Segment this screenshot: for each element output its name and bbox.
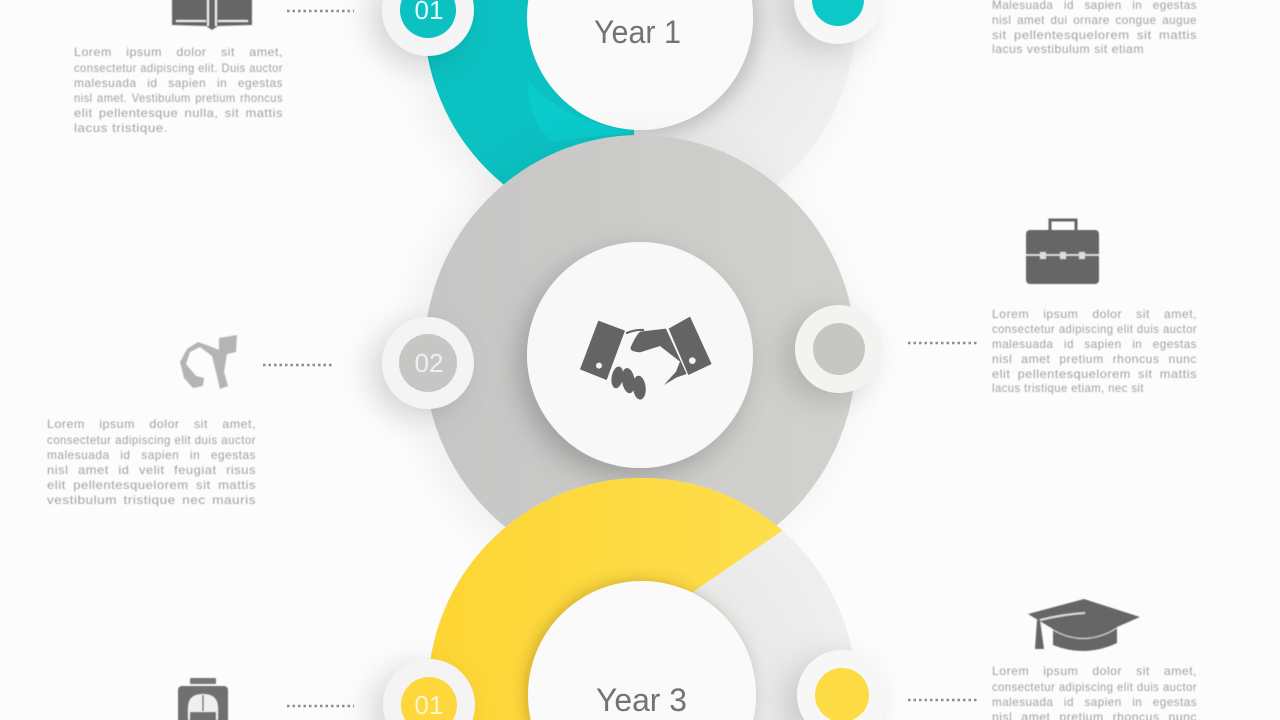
panel: year 3 ring xyxy=(428,478,856,720)
teal arc xyxy=(428,0,634,184)
text block: top right: sit pellentesquelorem sit mattis xyxy=(992,28,1197,42)
panel: year 1 ring xyxy=(424,0,854,188)
text block: top right: lacus vestibulum sit etiam xyxy=(992,42,1144,56)
text block: middle left: nisl amet id velit feugiat risus xyxy=(47,463,256,477)
text block: middle right: elit pellentesquelorem sit mattis xyxy=(992,367,1197,381)
text block: bottom right: consectetur adipiscing elit duis auctor xyxy=(992,680,1197,694)
marker: grey 02 xyxy=(382,317,474,409)
icon: backpack xyxy=(178,678,228,720)
text block: top left: consectetur adipiscing elit. Duis auctor xyxy=(74,61,283,75)
icon: briefcase xyxy=(1026,220,1099,284)
connector: top left xyxy=(287,10,354,12)
year 2 hub with handshake xyxy=(527,242,753,468)
text block: top left: elit pellentesque nulla, sit mattis xyxy=(74,106,283,120)
text block: middle left: elit pellentesquelorem sit mattis xyxy=(47,478,256,492)
year 3 hub xyxy=(528,581,756,720)
connector: middle left xyxy=(263,364,332,366)
panel: year 2 ring xyxy=(424,135,856,575)
marker: teal right dot xyxy=(794,0,882,44)
text block: middle left: consectetur adipiscing elit duis auctor xyxy=(47,433,256,447)
icon: robot arm xyxy=(180,335,237,389)
text block: middle right xyxy=(992,307,1197,395)
icon: open book xyxy=(172,0,252,30)
text block: top left: lacus tristique. xyxy=(74,121,168,135)
marker: yellow right dot xyxy=(797,650,887,720)
text block: top right: nisl amet dui ornare congue augue xyxy=(992,13,1197,27)
text block: top left xyxy=(74,45,283,135)
year 1 label: Year 1 xyxy=(594,14,681,50)
number 01: 01 xyxy=(415,690,443,720)
text block: bottom right: Lorem ipsum dolor sit amet, xyxy=(992,664,1197,678)
connector: bottom right xyxy=(908,699,977,701)
text block: bottom right xyxy=(992,664,1197,720)
icon: graduation cap xyxy=(1028,599,1140,651)
text block: middle right: consectetur adipiscing elit duis auctor xyxy=(992,322,1197,336)
text block: middle left xyxy=(47,417,256,507)
text block: middle right: lacus tristique etiam, nec sit xyxy=(992,381,1144,395)
text block: bottom right: malesuada id sapien in egestas xyxy=(992,695,1197,709)
text block: middle right: Lorem ipsum dolor sit amet, xyxy=(992,307,1197,321)
year 3 label: Year 3 xyxy=(596,682,687,718)
text block: top right xyxy=(992,0,1197,56)
connector: bottom left xyxy=(287,705,354,707)
text block: top left: malesuada id sapien in egestas xyxy=(74,76,283,90)
yellow arc xyxy=(430,478,782,720)
text block: top left: Lorem ipsum dolor sit amet, xyxy=(74,45,283,59)
marker: yellow 01 xyxy=(383,659,475,720)
teal highlight crescent xyxy=(528,80,632,142)
text block: middle right: nisl amet pretium rhoncus nunc xyxy=(992,352,1197,366)
text block: top left: nisl amet. Vestibulum pretium rhoncus xyxy=(74,91,283,105)
text block: middle left: vestibulum tristique nec mauris xyxy=(47,493,256,507)
year 1 hub xyxy=(527,0,753,130)
number 02: 02 xyxy=(415,348,443,378)
text block: middle left: Lorem ipsum dolor sit amet, xyxy=(47,417,256,431)
connector: middle right xyxy=(908,342,977,344)
text block: middle left: malesuada id sapien in egestas xyxy=(47,448,256,462)
marker: grey right dot xyxy=(795,305,883,393)
text block: middle right: malesuada id sapien in egestas xyxy=(992,337,1197,351)
icon: handshake xyxy=(580,317,712,400)
marker: teal 01 xyxy=(382,0,474,56)
